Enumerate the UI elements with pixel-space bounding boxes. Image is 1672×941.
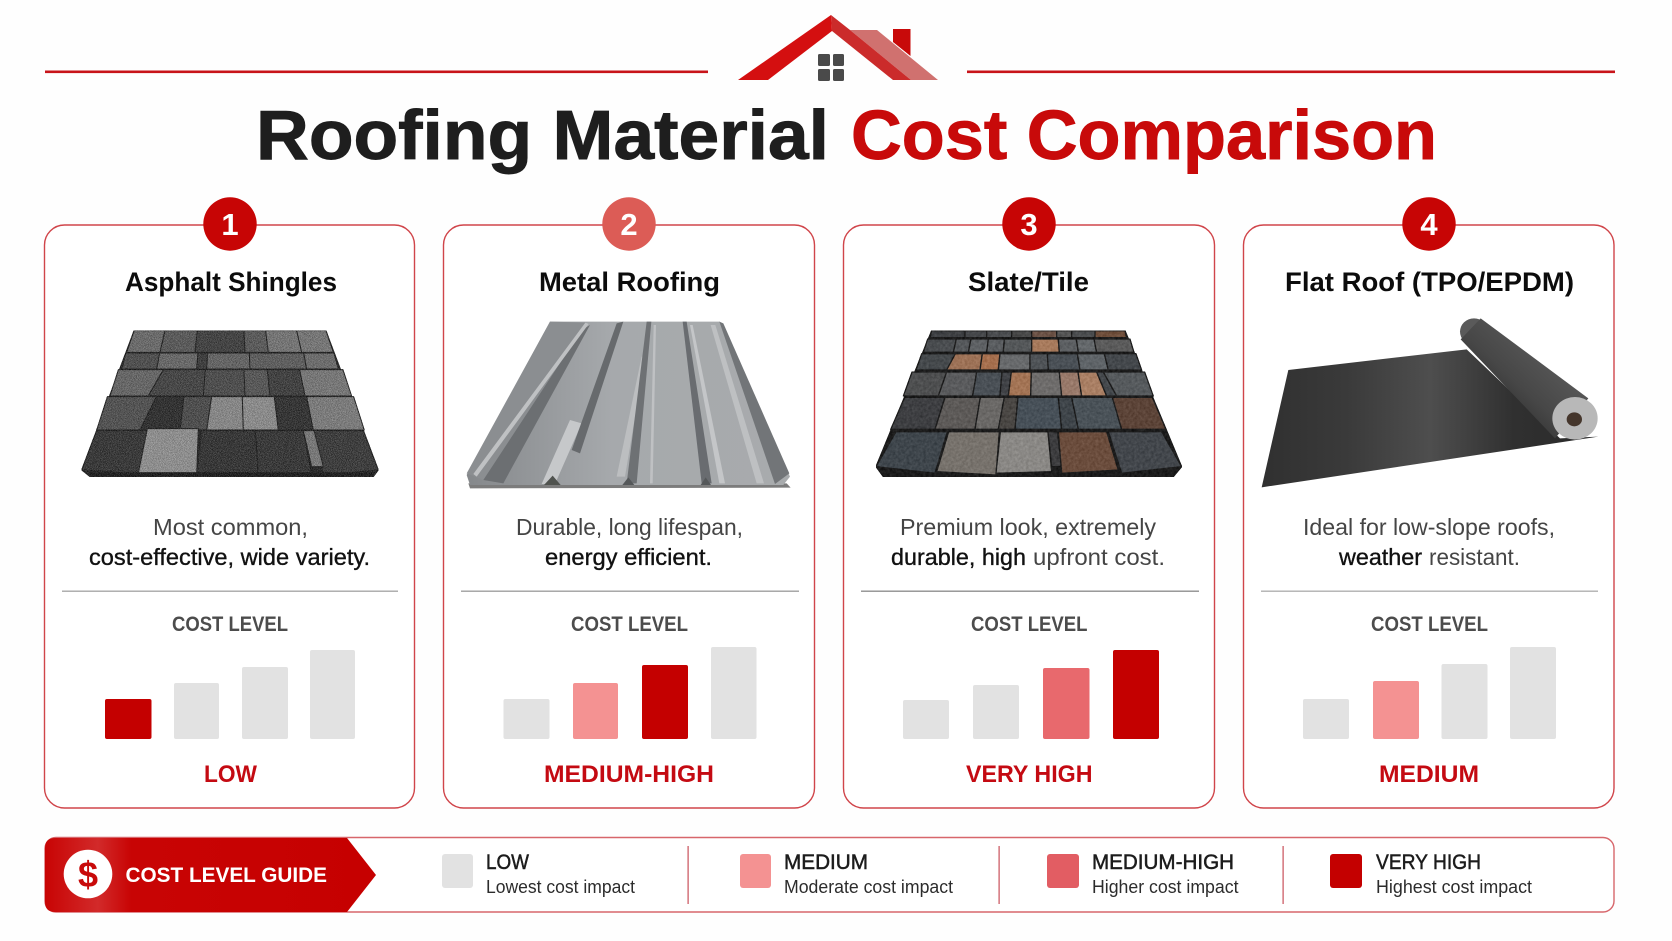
- number badge 4: [1402, 197, 1456, 251]
- legend item: medium: Moderate cost impact: [784, 877, 953, 897]
- number badge 2: 2: [620, 207, 638, 242]
- number badge 3: [1002, 197, 1056, 251]
- image: metal roofing: [467, 322, 791, 488]
- description: cost-effective, wide variety.: [89, 544, 370, 570]
- bar chart: medium-high: [504, 647, 756, 739]
- cost level label: COST LEVEL: [1371, 612, 1488, 636]
- legend item: very high: Highest cost impact: [1376, 877, 1532, 897]
- bar chart: low: [105, 650, 355, 739]
- cost rating: MEDIUM: [1379, 761, 1479, 788]
- legend item: medium: MEDIUM: [784, 851, 868, 874]
- description: durable, high: [891, 544, 1026, 570]
- image: rolled membrane: [1262, 318, 1598, 487]
- guide tag: [45, 838, 376, 912]
- title: Roofing Material: [256, 96, 829, 174]
- legend item: medium-high: [1047, 851, 1238, 897]
- icon: dollar coin: $: [78, 854, 98, 895]
- description: resistant.: [1429, 544, 1520, 570]
- title: Cost Comparison: [851, 96, 1437, 174]
- separator: [998, 846, 1000, 904]
- description: [89, 514, 370, 570]
- description: weather: [1338, 544, 1422, 570]
- card outline: [44, 225, 414, 808]
- number badge 1: 1: [221, 207, 239, 242]
- heading: Metal Roofing: [539, 267, 720, 297]
- legend item: very high: VERY HIGH: [1376, 851, 1481, 874]
- description: Ideal for low-slope roofs,: [1303, 514, 1555, 540]
- divider: [861, 590, 1199, 592]
- cost rating: LOW: [204, 761, 258, 788]
- number badge 1: [203, 197, 257, 251]
- cost level label: COST LEVEL: [172, 612, 288, 636]
- description: [516, 514, 743, 570]
- heading: Slate/Tile: [968, 267, 1089, 297]
- bar chart: very high: [903, 650, 1159, 739]
- number badge 3: 3: [1020, 207, 1038, 242]
- bar chart: medium: [1303, 647, 1556, 739]
- separator: [1282, 846, 1284, 904]
- card outline: [1244, 225, 1614, 808]
- description: Most common,: [153, 514, 308, 540]
- legend item: low: Lowest cost impact: [486, 877, 635, 897]
- guide label: COST LEVEL GUIDE: [126, 864, 327, 887]
- panel: slate and tile: [844, 197, 1214, 808]
- card outline: [844, 225, 1214, 808]
- cost rating: MEDIUM-HIGH: [544, 761, 714, 788]
- separator: [688, 846, 689, 904]
- cost level label: COST LEVEL: [571, 612, 688, 636]
- divider: [461, 590, 799, 592]
- cost rating: VERY HIGH: [966, 761, 1092, 788]
- number badge 2: [602, 197, 656, 251]
- legend item: low: LOW: [486, 851, 529, 874]
- panel: asphalt shingles: [44, 197, 414, 808]
- panel: cost level guide: [45, 838, 1614, 912]
- icon: dollar coin: [64, 850, 112, 898]
- legend item: medium-high: Higher cost impact: [1092, 877, 1238, 897]
- description: energy efficient.: [545, 544, 712, 570]
- panel: metal roofing: [444, 197, 814, 808]
- number badge 4: 4: [1420, 207, 1438, 242]
- description: [1303, 514, 1555, 570]
- header rule right: [967, 70, 1615, 73]
- header rule left: [45, 70, 708, 73]
- legend frame: [45, 838, 1614, 912]
- image: asphalt shingles: [82, 331, 378, 477]
- heading: Asphalt Shingles: [125, 267, 337, 297]
- description: Durable, long lifespan,: [516, 514, 743, 540]
- divider: [62, 590, 398, 592]
- legend item: medium-high: MEDIUM-HIGH: [1092, 851, 1234, 874]
- icon: house roof logo: [738, 15, 938, 81]
- description: Premium look, extremely: [900, 514, 1156, 540]
- description: [891, 514, 1165, 570]
- panel: flat roof: [1244, 197, 1614, 808]
- image: slate tile: [876, 331, 1182, 477]
- legend item: very high: [1330, 851, 1532, 897]
- divider: [1261, 590, 1598, 592]
- legend item: medium: [740, 851, 953, 897]
- cost level label: COST LEVEL: [971, 612, 1088, 636]
- title: [256, 96, 1437, 174]
- heading: Flat Roof (TPO/EPDM): [1285, 267, 1574, 297]
- legend item: low: [442, 851, 635, 897]
- card outline: [444, 225, 814, 808]
- description: upfront cost.: [1033, 544, 1165, 570]
